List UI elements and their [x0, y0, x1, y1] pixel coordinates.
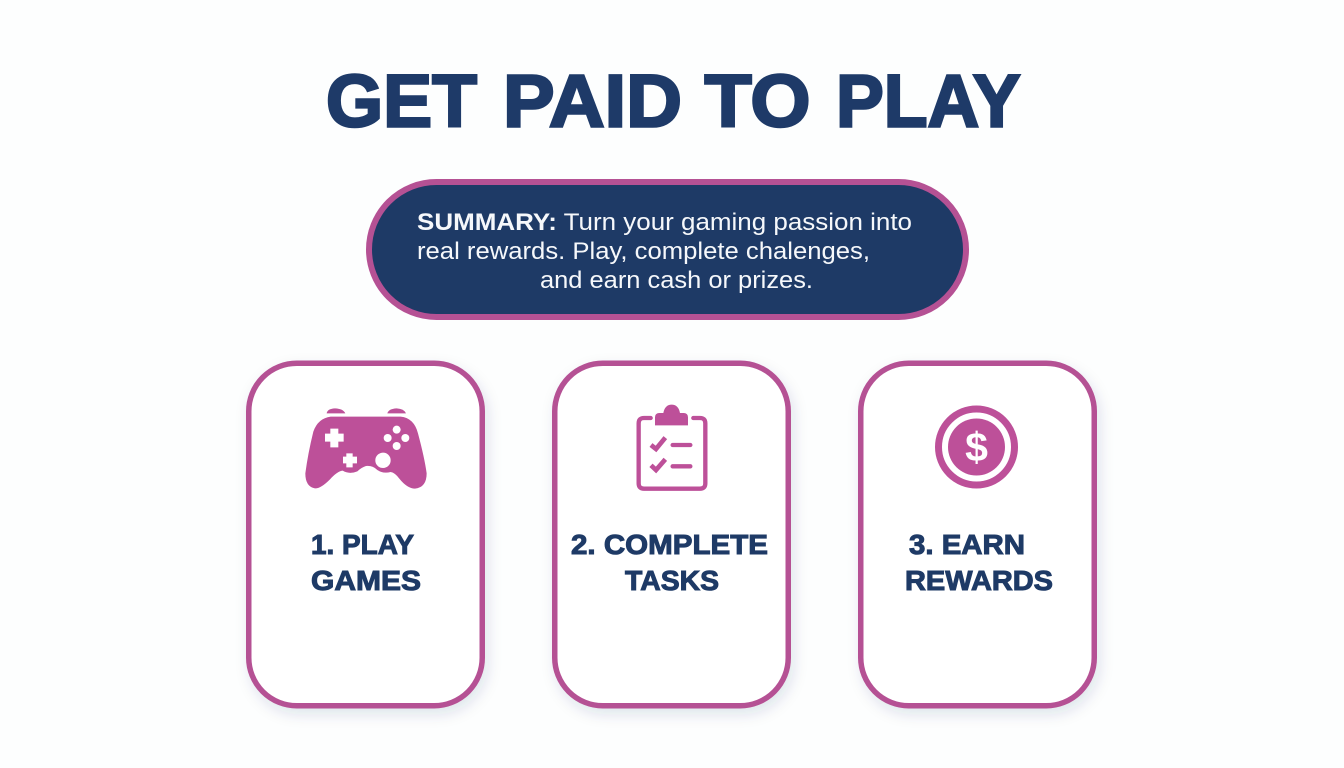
label: earn rewards: 3. EARN — [909, 529, 1025, 560]
title: TO — [704, 60, 810, 142]
label: play games — [311, 529, 421, 596]
title: PLAY — [836, 60, 1020, 142]
panel: step 2 complete tasks — [555, 363, 788, 706]
summary text — [417, 209, 912, 294]
panel: summary — [369, 182, 966, 317]
label: play games: 1. PLAY — [311, 529, 414, 560]
label: complete tasks: 2. COMPLETE — [571, 529, 768, 560]
label: earn rewards: REWARDS — [905, 565, 1053, 596]
icon: dollar coin: $ — [965, 424, 988, 470]
icon: dollar coin — [938, 409, 1014, 485]
icon: game controller — [305, 408, 427, 489]
title: GET — [326, 60, 477, 142]
label: complete tasks: TASKS — [625, 565, 719, 596]
panel: step 3 earn rewards — [861, 363, 1094, 706]
summary text: SUMMARY: Turn your gaming passion into — [417, 209, 912, 236]
panel: step 1 play games — [249, 363, 482, 706]
label: earn rewards — [905, 529, 1053, 596]
icon: clipboard checklist — [639, 405, 705, 489]
summary text: real rewards. Play, complete chalenges, — [417, 238, 870, 265]
label: play games: GAMES — [311, 565, 421, 596]
summary text: and earn cash or prizes. — [540, 267, 813, 294]
title — [326, 60, 1020, 142]
title: PAID — [503, 60, 682, 142]
label: complete tasks — [571, 529, 768, 596]
